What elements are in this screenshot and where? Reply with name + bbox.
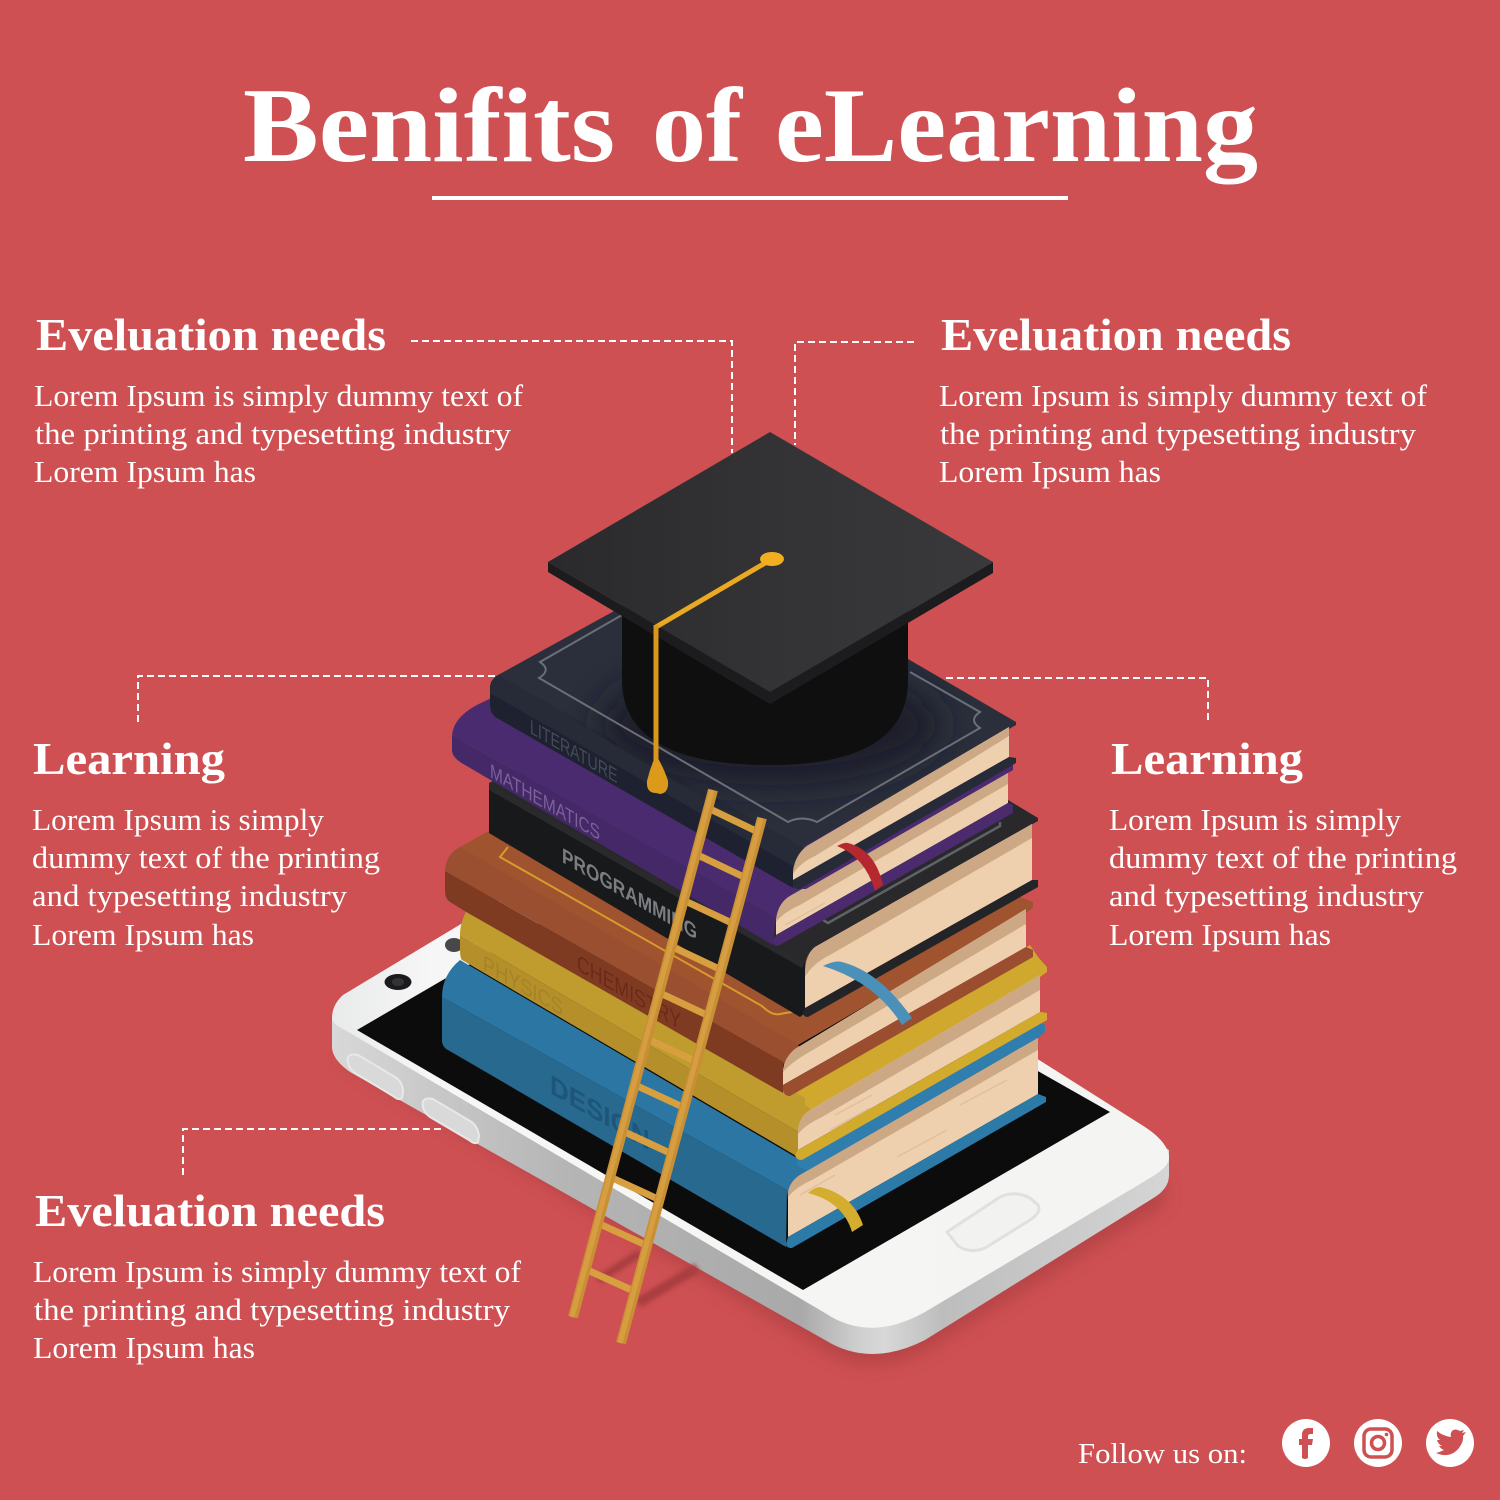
hat shadow on cover <box>596 686 944 790</box>
callout: top left: the printing and typesetting industry <box>35 416 512 451</box>
title: Benifits <box>243 67 615 184</box>
side button upper <box>348 1054 403 1099</box>
icon: instagram <box>1354 1419 1402 1467</box>
callout: bottom left: Eveluation needs <box>35 1185 385 1236</box>
callout: top left: Eveluation needs <box>36 309 386 360</box>
spine label: CHEMISTRY <box>577 949 681 1035</box>
follow us text: Follow us on: <box>1078 1438 1247 1470</box>
book: physics <box>460 908 1047 1160</box>
board top <box>548 432 993 692</box>
spine label: LITERATURE <box>530 716 617 789</box>
spine label: MATHEMATICS <box>490 760 600 846</box>
icon: facebook <box>1282 1419 1330 1467</box>
book: chemistry <box>445 715 1033 1096</box>
callout: middle left <box>32 733 380 952</box>
bookmark <box>823 962 912 1025</box>
icon: twitter <box>1426 1419 1474 1467</box>
callout: middle right: Lorem Ipsum has <box>1109 917 1331 952</box>
spine label: PHYSICS <box>483 950 563 1021</box>
callout: middle right: Learning <box>1111 733 1303 784</box>
spine label: PROGRAMMING <box>562 844 697 945</box>
book: design <box>442 960 1046 1248</box>
title <box>243 67 1258 200</box>
callout: top right: Lorem Ipsum has <box>939 454 1161 489</box>
book: programming <box>489 640 1038 1025</box>
callout: top right: the printing and typesetting industry <box>940 416 1417 451</box>
smartphone <box>332 812 1169 1354</box>
tassel button <box>760 552 784 566</box>
tassel <box>647 755 668 794</box>
phone screen <box>357 855 1110 1290</box>
callout: middle left: Lorem Ipsum is simply <box>32 802 324 837</box>
spine label: DESIGN <box>550 1069 650 1157</box>
callout: bottom left: Lorem Ipsum is simply dummy text of <box>33 1254 522 1289</box>
callout: top left: Lorem Ipsum is simply dummy text of <box>34 378 524 413</box>
callout: middle right <box>1109 733 1457 952</box>
camera <box>384 974 412 990</box>
callout: top right: Lorem Ipsum is simply dummy text of <box>939 378 1428 413</box>
bookmark <box>837 843 883 891</box>
home button <box>947 1194 1039 1251</box>
callout: middle left: and typesetting industry <box>32 878 348 913</box>
book: literature <box>490 611 1016 891</box>
graduation cap <box>548 432 993 794</box>
ladder <box>572 790 762 1343</box>
callout: middle left: Learning <box>33 733 225 784</box>
callout: top right: Eveluation needs <box>941 309 1291 360</box>
bookmark <box>808 1187 863 1232</box>
tassel cord <box>656 559 772 762</box>
title: of <box>652 67 744 184</box>
phone top surface <box>332 812 1169 1328</box>
ladder shadow <box>598 1253 697 1303</box>
callout: middle left: dummy text of the printing <box>32 840 380 875</box>
phone side <box>332 820 1169 1354</box>
speaker <box>445 938 463 952</box>
callout: middle left: Lorem Ipsum has <box>32 917 254 952</box>
side button lower <box>423 1098 479 1143</box>
dashed connector lines <box>138 341 1208 1175</box>
board thickness <box>548 562 993 704</box>
gold line <box>500 847 797 1014</box>
cover border <box>539 615 980 822</box>
title: eLearning <box>775 67 1258 184</box>
callout: bottom left <box>33 1185 522 1365</box>
cap base <box>622 605 908 765</box>
callout: top left <box>34 309 524 489</box>
callout: top right <box>939 309 1428 489</box>
callout: middle right: Lorem Ipsum is simply <box>1109 802 1401 837</box>
callout: middle right: and typesetting industry <box>1109 878 1425 913</box>
phone shadow <box>340 900 1165 1365</box>
callout: middle right: dummy text of the printing <box>1109 840 1457 875</box>
callout: top left: Lorem Ipsum has <box>34 454 256 489</box>
callout: bottom left: Lorem Ipsum has <box>33 1330 255 1365</box>
book: mathematics <box>452 600 1013 946</box>
callout: bottom left: the printing and typesetting industry <box>34 1292 511 1327</box>
